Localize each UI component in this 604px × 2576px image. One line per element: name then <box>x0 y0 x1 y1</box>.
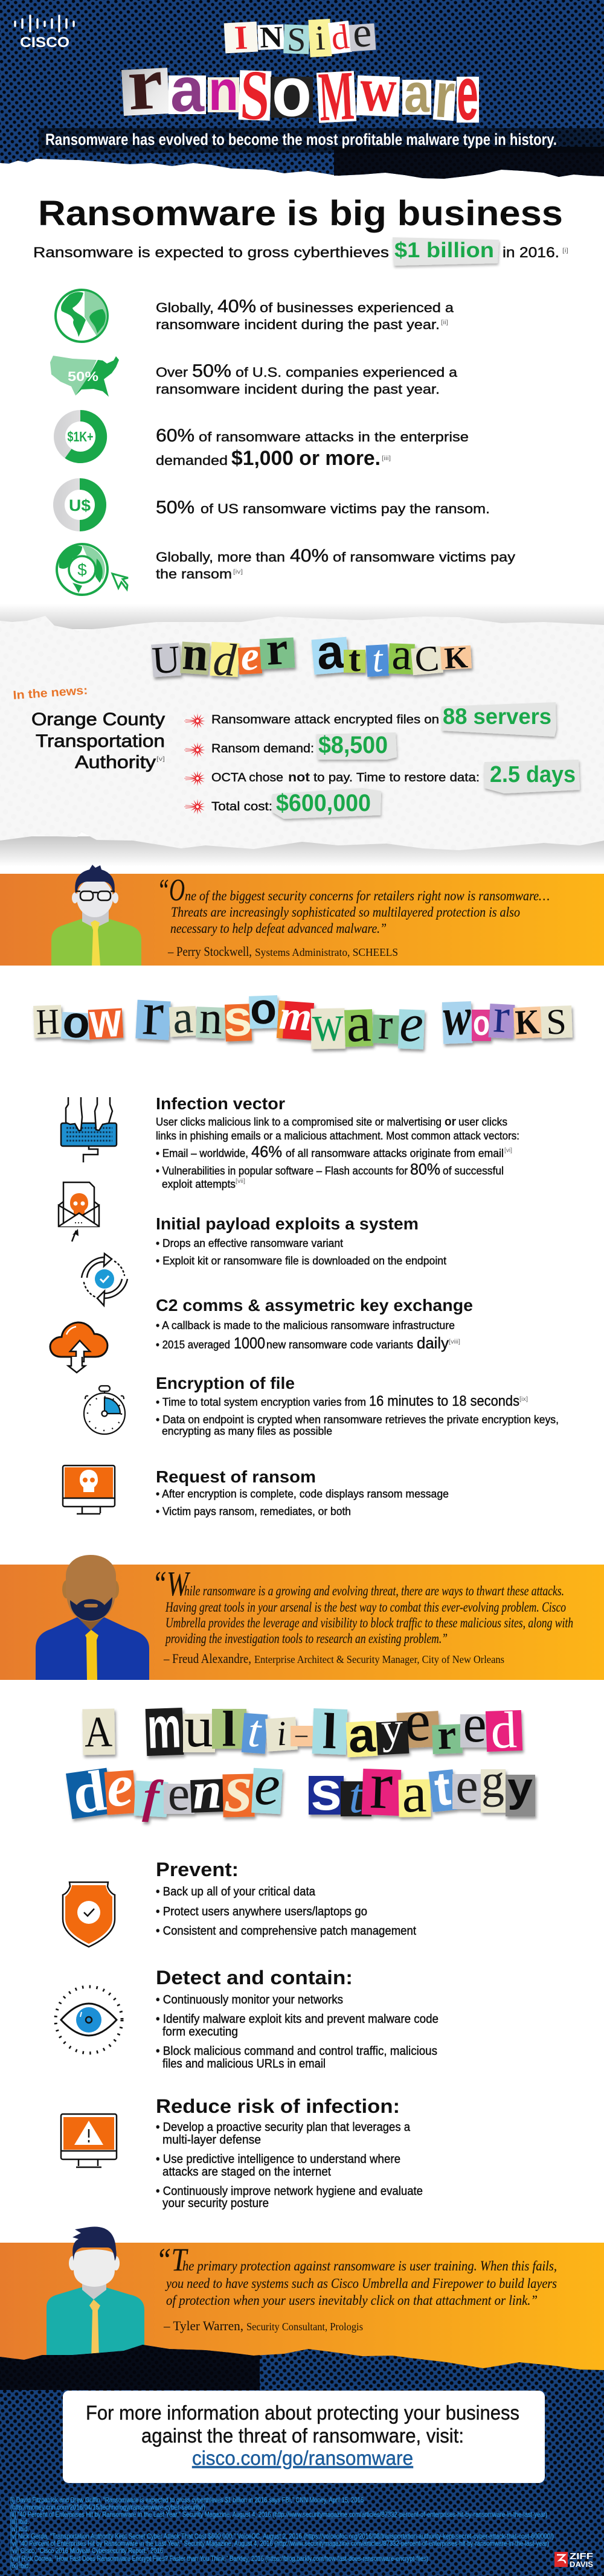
header background <box>0 0 604 179</box>
stat: 50 percent pay the ransom: 50% <box>156 498 194 517</box>
heading: A multi-layered defense strategy: a <box>347 1708 377 1763</box>
title: Inside Ransomware: r <box>432 60 457 132</box>
heading: Under attack: d <box>212 634 238 686</box>
quote: Tyler Warren: of protection when your users inevitably click on that attachment or link.” <box>166 2293 538 2308</box>
stat: 60 percent demanded $1,000: of ransomware attacks in the enterprise <box>199 429 469 444</box>
heading: Under attack: a <box>391 629 413 680</box>
heading: A multi-layered defense strategy: A <box>84 1708 113 1756</box>
icon: bearded man <box>36 1555 149 1680</box>
label: In the news: In the news: <box>13 684 88 702</box>
panel: quote band 1 <box>0 874 604 966</box>
icon: cloud with arrows <box>50 1322 108 1373</box>
text: infection vector: Infection vector <box>156 1094 285 1113</box>
heading: A multi-layered defense strategy: n <box>191 1761 222 1820</box>
title: Inside Ransomware: M <box>317 57 356 136</box>
text: Orange County Transportation Authority: Authority <box>75 752 156 772</box>
footnotes: (http://money.cnn.com/2016/04/15/technology/ransomware-cyber-security/) <box>10 2503 205 2511</box>
text: Detect and contain: files and malicious URLs in email <box>162 2057 326 2071</box>
text: encryption of file: [ix] <box>519 1396 528 1403</box>
panel: call to action: cisco.com/go/ransomware <box>192 2447 413 2469</box>
heading: How ransomware works: m <box>278 992 313 1040</box>
stat: more than 40 percent pay: the ransom <box>156 566 232 582</box>
quote: Perry Stockwell: – Perry Stockwell, <box>167 944 252 959</box>
list: attack facts: Total cost: <box>211 800 272 813</box>
text: infection vector: of successful <box>443 1165 504 1177</box>
footnotes: [i] David Fitzpatrick and Drew Griffin, “Ransomware is expected to gross cyberthieves $1 billion in 2016 says FBI,” CNN Money, April 15, 2016 <box>10 2496 364 2504</box>
text: Reduce risk of infection: Reduce risk of infection: <box>156 2095 400 2117</box>
heading: Under attack: a <box>314 624 346 680</box>
heading: How ransomware works: o <box>62 996 91 1048</box>
quote: Freud Alexandre: “W <box>152 1564 190 1603</box>
heading: A multi-layered defense strategy: l <box>322 1703 338 1760</box>
stat: more than 40 percent pay <box>156 546 515 582</box>
quote: Perry Stockwell: “O <box>157 873 185 908</box>
footer background <box>0 2345 604 2576</box>
heading: Under attack: n <box>181 627 210 681</box>
heading: A multi-layered defense strategy: d <box>490 1700 518 1760</box>
text: Detect and contain: • Continuously monitor your networks <box>156 1993 343 2007</box>
icon: globe with dollar and cursor <box>57 544 128 595</box>
title: Inside Ransomware: a <box>404 63 430 124</box>
heading: How ransomware works: r <box>378 1000 394 1048</box>
stat: 60 percent demanded $1,000: [iii] <box>382 455 391 462</box>
stat: 60 percent demanded $1,000: demanded <box>156 453 228 468</box>
text: infection vector: of all ransomware attacks originate from email <box>286 1147 504 1159</box>
heading: Under attack: K <box>443 640 469 675</box>
icon: man with glasses <box>51 865 141 966</box>
heading: Under attack: e <box>240 632 260 679</box>
text: Reduce risk of infection: multi-layer defense <box>162 2133 261 2147</box>
text: infection vector: • Email – worldwide, <box>156 1147 248 1159</box>
heading: A multi-layered defense strategy: s <box>310 1761 342 1822</box>
text: Reduce risk of infection: • Use predictive intelligence to understand where <box>156 2153 400 2166</box>
footnotes: [viii] Rick Correa, “How Fast Does Ransomware Encrypt Files? Faster than You Think,” Barkley, 2016 (https://blog.barkly.com/how-fast-does-ransomware-encrypt-files) <box>10 2554 428 2563</box>
title: Inside Ransomware: r <box>126 42 165 126</box>
stat: over 50 percent of US companies <box>156 361 458 397</box>
heading: A multi-layered defense strategy: r <box>369 1748 394 1824</box>
footnotes: [iii] Ibid. <box>10 2517 29 2526</box>
stat: more than 40 percent pay: Globally, more than <box>156 549 285 565</box>
stat: over 50 percent of US companies: of U.S. companies experienced a <box>236 365 458 380</box>
title: Inside Ransomware: d <box>329 16 351 58</box>
quote: Freud Alexandre <box>152 1564 573 1666</box>
icon: Ziff Davis logo: ZIFF <box>570 2551 593 2562</box>
heading: A multi-layered defense strategy: r <box>437 1711 457 1759</box>
text: encryption of file: • Time to total system encryption varies from <box>156 1396 366 1408</box>
text: Orange County Transportation Authority: [v] <box>156 756 165 763</box>
text: C2 comms: • 2015 averaged <box>156 1339 230 1351</box>
title: Inside Ransomware: S <box>239 55 271 135</box>
icon: envelope with skull <box>59 1182 99 1242</box>
stat: 60 percent demanded $1,000 <box>156 426 469 470</box>
text: infection vector: 46% <box>251 1142 282 1161</box>
icon: Cisco logo <box>15 16 74 51</box>
quote: Freud Alexandre: Enterprise Architect & Security Manager, City of New Orleans <box>254 1653 504 1665</box>
text: infection vector: User clicks malicious link to a compromised site or malvertising <box>156 1116 442 1128</box>
footnotes: [vii] Cisco, “Cisco 2016 Midyear Cybersecurity Report,” 2016 <box>10 2546 163 2555</box>
heading: A multi-layered defense strategy: – <box>295 1720 308 1748</box>
text: encryption of file: 16 minutes to 18 seconds <box>369 1393 519 1409</box>
heading: A multi-layered defense strategy: l <box>222 1701 236 1757</box>
footnotes: [ix] Ibid. <box>10 2562 30 2570</box>
title: Inside Ransomware: i <box>314 18 326 57</box>
panel: call to action: For more information about protecting your business <box>86 2401 519 2424</box>
heading: How ransomware works: o <box>473 1004 490 1043</box>
heading: A multi-layered defense strategy: y <box>380 1703 404 1753</box>
text: Orange County Transportation Authority: Orange County <box>31 710 165 729</box>
title: Inside Ransomware: o <box>272 53 312 131</box>
text: initial payload: • Drops an effective ransomware variant <box>156 1237 343 1249</box>
heading: A multi-layered defense strategy: i <box>275 1714 288 1753</box>
quote: Tyler Warren: “T <box>156 2241 188 2278</box>
icon: Ziff Davis logo <box>554 2551 593 2569</box>
text: Prevent: • Protect users anywhere users/laptops go <box>156 1905 367 1918</box>
heading: Under attack: U <box>150 637 181 682</box>
stat: 40 percent of businesses <box>156 296 454 332</box>
text: C2 comms: new ransomware code variants <box>266 1339 413 1351</box>
panel: quote band 3 <box>0 2243 604 2376</box>
quote: Perry Stockwell: necessary to help defeat advanced malware.” <box>170 921 387 936</box>
heading: How ransomware works: a <box>345 991 372 1054</box>
title: Inside Ransomware: a <box>170 55 205 125</box>
text: encryption of file <box>156 1374 559 1437</box>
text: Prevent: • Consistent and comprehensive patch management <box>156 1924 416 1938</box>
text: Prevent <box>156 1859 416 1938</box>
footnotes: [iv] Ibid. <box>10 2525 29 2533</box>
heading: How ransomware works: r <box>492 989 511 1043</box>
heading: A multi-layered defense strategy: d <box>69 1758 110 1826</box>
stat: 40 percent of businesses: ransomware incident during the past year. <box>156 317 440 332</box>
stat: more than 40 percent pay: of ransomware victims pay <box>333 549 515 565</box>
text: Reduce risk of infection: • Continuously improve network hygiene and evaluate <box>156 2185 423 2198</box>
heading: A multi-layered defense strategy: f <box>142 1769 164 1823</box>
quote: Perry Stockwell: ne of the biggest security concerns for retailers right now is ransomware… <box>185 888 550 903</box>
heading: A multi-layered defense strategy: e <box>463 1695 487 1754</box>
heading: A multi-layered defense strategy: e <box>403 1688 432 1754</box>
panel: under attack paper background <box>0 604 604 867</box>
title: Inside Ransomware: n <box>208 59 239 122</box>
panel: call to action <box>63 2391 545 2483</box>
title: Inside Ransomware <box>120 9 479 136</box>
list: attack facts: OCTA chose <box>211 771 283 784</box>
text: initial payload: • Exploit kit or ransomware file is downloaded on the endpoint <box>156 1255 446 1267</box>
text: request of ransom <box>156 1467 449 1517</box>
panel: quote band 2 <box>0 1565 604 1680</box>
text: infection vector <box>156 1094 519 1190</box>
text: encryption of file: encrypting as many files as possible <box>162 1425 332 1437</box>
title: Inside Ransomware: e <box>457 52 478 136</box>
text: infection vector: exploit attempts <box>162 1178 236 1190</box>
quote: Perry Stockwell: Systems Administrato, SCHEELS <box>255 946 398 958</box>
stat: more than 40 percent pay: 40% <box>290 546 329 566</box>
icon: globe with dollar and cursor: $ <box>77 560 87 579</box>
heading: Under attack: r <box>265 621 289 675</box>
heading: How ransomware works: a <box>172 992 194 1043</box>
list: attack facts: $600,000 <box>276 790 371 816</box>
icon: Cisco logo: CISCO <box>20 34 69 51</box>
text: Orange County Transportation Authority: Transportation <box>36 731 165 751</box>
text: initial payload <box>156 1214 446 1267</box>
heading: How ransomware works: r <box>141 978 165 1049</box>
heading: How ransomware works: w <box>442 987 472 1047</box>
heading: Ransomware is big business: Ransomware is big business <box>38 194 563 233</box>
text: request of ransom: Request of ransom <box>156 1467 316 1486</box>
stat: 40 percent of businesses: [ii] <box>441 319 448 326</box>
stat: over 50 percent of US companies: Over <box>156 365 188 380</box>
text: Reduce risk of infection: your security posture <box>162 2197 269 2210</box>
list: attack facts: Ransom demand: <box>211 742 314 755</box>
text: infection vector: user clicks <box>458 1116 507 1128</box>
text: Prevent: Prevent: <box>156 1859 239 1880</box>
heading: How ransomware works <box>33 978 573 1054</box>
heading: A multi-layered defense strategy: m <box>146 1695 182 1761</box>
text: C2 comms: C2 comms & assymetric key exchange <box>156 1296 473 1315</box>
panel: call to action: against the threat of ransomware, visit: <box>141 2424 464 2447</box>
heading: A multi-layered defense strategy: t <box>349 1768 364 1823</box>
icon: cycle arrows with check <box>82 1254 127 1306</box>
list: attack facts: to pay. Time to restore data: <box>313 771 480 784</box>
text: Reduce risk of infection <box>156 2095 423 2210</box>
text: expected to gross $1 billion: $1 billion <box>394 239 494 262</box>
heading: How ransomware works: s <box>223 989 253 1047</box>
text: infection vector: links in phishing emails or a malicious attachment. Most common attack vectors: <box>156 1130 519 1142</box>
quote: Tyler Warren: he primary protection against ransomware is user training. When this fails, <box>182 2258 557 2273</box>
heading: How ransomware works: w <box>88 993 123 1048</box>
text: Detect and contain: Detect and contain: <box>156 1967 353 1988</box>
text: Detect and contain <box>156 1967 439 2071</box>
text: encryption of file: • Data on endpoint is crypted when ransomware retrieves the private encryption keys, <box>156 1414 559 1426</box>
icon: green globe <box>56 290 108 342</box>
heading: A multi-layered defense strategy: e <box>253 1752 281 1818</box>
heading: How ransomware works: e <box>399 994 425 1054</box>
heading: A multi-layered defense strategy: a <box>402 1762 427 1824</box>
list: attack facts: 88 servers <box>443 704 551 729</box>
stat: 40 percent of businesses: Globally, <box>156 300 214 315</box>
heading: How ransomware works: w <box>312 994 344 1052</box>
heading: Under attack: t <box>371 639 385 680</box>
stat: 50 percent pay the ransom: of US ransomware victims pay the ransom. <box>201 501 490 516</box>
text: Reduce risk of infection: • Develop a proactive security plan that leverages a <box>156 2121 411 2134</box>
title: Inside Ransomware: I <box>234 19 249 57</box>
text: Reduce risk of infection: attacks are staged on the internet <box>162 2165 331 2179</box>
text: C2 comms: 1000 <box>234 1334 265 1352</box>
text: Detect and contain: • Identify malware exploit kits and prevent malware code <box>156 2013 439 2026</box>
icon: monitor with skull <box>63 1466 115 1514</box>
heading: A multi-layered defense strategy <box>65 1687 535 1827</box>
heading: Under attack <box>150 621 472 686</box>
list: attack facts: 2.5 days <box>490 762 576 787</box>
heading: How ransomware works: K <box>514 1002 541 1042</box>
quote: Freud Alexandre: – Freud Alexandre, <box>163 1651 251 1666</box>
title: Inside Ransomware: w <box>359 54 397 125</box>
title: Inside Ransomware: S <box>286 21 307 59</box>
list: attack facts: $8,500 <box>318 732 388 758</box>
list: attack facts <box>184 702 580 819</box>
text: expected to gross $1 billion: [i] <box>562 248 568 254</box>
title: Inside Ransomware: e <box>351 9 373 57</box>
icon: donut $1K+: $1K+ <box>68 429 93 444</box>
stat: over 50 percent of US companies: 50% <box>192 361 231 381</box>
icon: man in teal shirt <box>47 2227 144 2361</box>
list: attack facts: Ransomware attack encrypted files on <box>211 713 439 726</box>
heading: Under attack: C <box>413 638 441 680</box>
heading: A multi-layered defense strategy: t <box>246 1705 264 1757</box>
icon: shield with check <box>63 1882 115 1947</box>
text: Orange County Transportation Authority <box>31 710 165 772</box>
icon: hands on keyboard <box>61 1097 117 1162</box>
footnotes <box>10 2496 554 2570</box>
text: expected to gross $1 billion: in 2016. <box>503 245 559 261</box>
stat: 60 percent demanded $1,000: $1,000 or more. <box>231 447 381 470</box>
text: expected to gross $1 billion: Ransomware is expected to gross cyberthieves <box>33 245 389 261</box>
text: Detect and contain: form executing <box>162 2025 238 2039</box>
stat: more than 40 percent pay: [iv] <box>233 569 243 575</box>
heading: A multi-layered defense strategy: g <box>481 1755 504 1807</box>
text: request of ransom: • After encryption is complete, code displays ransom message <box>156 1488 449 1500</box>
icon: US map 50 percent: 50% <box>68 369 98 384</box>
icon: Ziff Davis logo: DAVIS <box>570 2560 593 2569</box>
quote: Tyler Warren <box>156 2241 557 2333</box>
text: request of ransom: • Victim pays ransom, remediates, or both <box>156 1505 351 1517</box>
title: Inside Ransomware: N <box>259 19 283 54</box>
stat: 40 percent of businesses: 40% <box>217 296 256 316</box>
quote: Tyler Warren: – Tyler Warren, <box>163 2318 243 2333</box>
text: initial payload: Initial payload exploits a system <box>156 1214 419 1233</box>
quote: Tyler Warren: Security Consultant, Prologis <box>246 2321 363 2333</box>
text: infection vector: [vii] <box>236 1178 245 1185</box>
stat: over 50 percent of US companies: ransomware incident during the past year. <box>156 382 440 397</box>
text: infection vector: [vi] <box>504 1147 512 1154</box>
text: C2 comms: daily <box>417 1334 449 1352</box>
icon: donut US$: U$ <box>69 496 91 514</box>
heading: How ransomware works: H <box>36 1001 60 1042</box>
heading: A multi-layered defense strategy: e <box>455 1758 478 1814</box>
quote: Perry Stockwell: Threats are increasingly sophisticated so multilayered protection is also <box>171 905 520 920</box>
text: C2 comms: • A callback is made to the malicious ransomware infrastructure <box>156 1319 455 1331</box>
text: C2 comms <box>156 1296 473 1352</box>
text: infection vector: or <box>445 1115 456 1129</box>
quote: Tyler Warren: you need to have systems such as Cisco Umbrella and Firepower to build layers <box>165 2276 557 2291</box>
icon: donut $1K+ <box>59 415 101 458</box>
heading: A multi-layered defense strategy: u <box>184 1694 213 1759</box>
heading: A multi-layered defense strategy: y <box>507 1764 533 1810</box>
quote: Freud Alexandre: providing the investigation tools to research an existing problem.” <box>164 1631 448 1646</box>
icon: monitor with warning <box>61 2114 117 2167</box>
heading: A multi-layered defense strategy: t <box>432 1761 453 1816</box>
text: C2 comms: [viii] <box>449 1339 460 1345</box>
heading: A multi-layered defense strategy: e <box>168 1766 190 1821</box>
icon: stopwatch <box>84 1386 125 1434</box>
icon: eye <box>56 1987 122 2053</box>
heading: How ransomware works: S <box>545 1001 567 1042</box>
text: encryption of file: Encryption of file <box>156 1374 295 1392</box>
text: Detect and contain: • Block malicious command and control traffic, malicious <box>156 2045 437 2058</box>
icon: US map 50 percent <box>50 356 119 397</box>
stat: 60 percent demanded $1,000: 60% <box>156 426 194 446</box>
heading: How ransomware works: o <box>249 984 277 1034</box>
heading: A multi-layered defense strategy: s <box>223 1751 253 1826</box>
heading: How ransomware works: n <box>199 992 223 1044</box>
heading: A multi-layered defense strategy: e <box>104 1753 135 1819</box>
text: expected to gross $1 billion <box>33 237 568 266</box>
text: infection vector: 80% <box>410 1160 440 1178</box>
icon: donut US$ <box>59 484 100 525</box>
stat: 50 percent pay the ransom <box>156 498 490 517</box>
list: attack facts: not <box>288 771 310 784</box>
text: infection vector: • Vulnerabilities in popular software – Flash accounts for <box>156 1165 408 1177</box>
heading: Under attack: t <box>349 639 361 679</box>
quote: Perry Stockwell <box>157 873 550 959</box>
stat: 40 percent of businesses: of businesses experienced a <box>260 300 454 315</box>
text: Prevent: • Back up all of your critical data <box>156 1885 316 1898</box>
